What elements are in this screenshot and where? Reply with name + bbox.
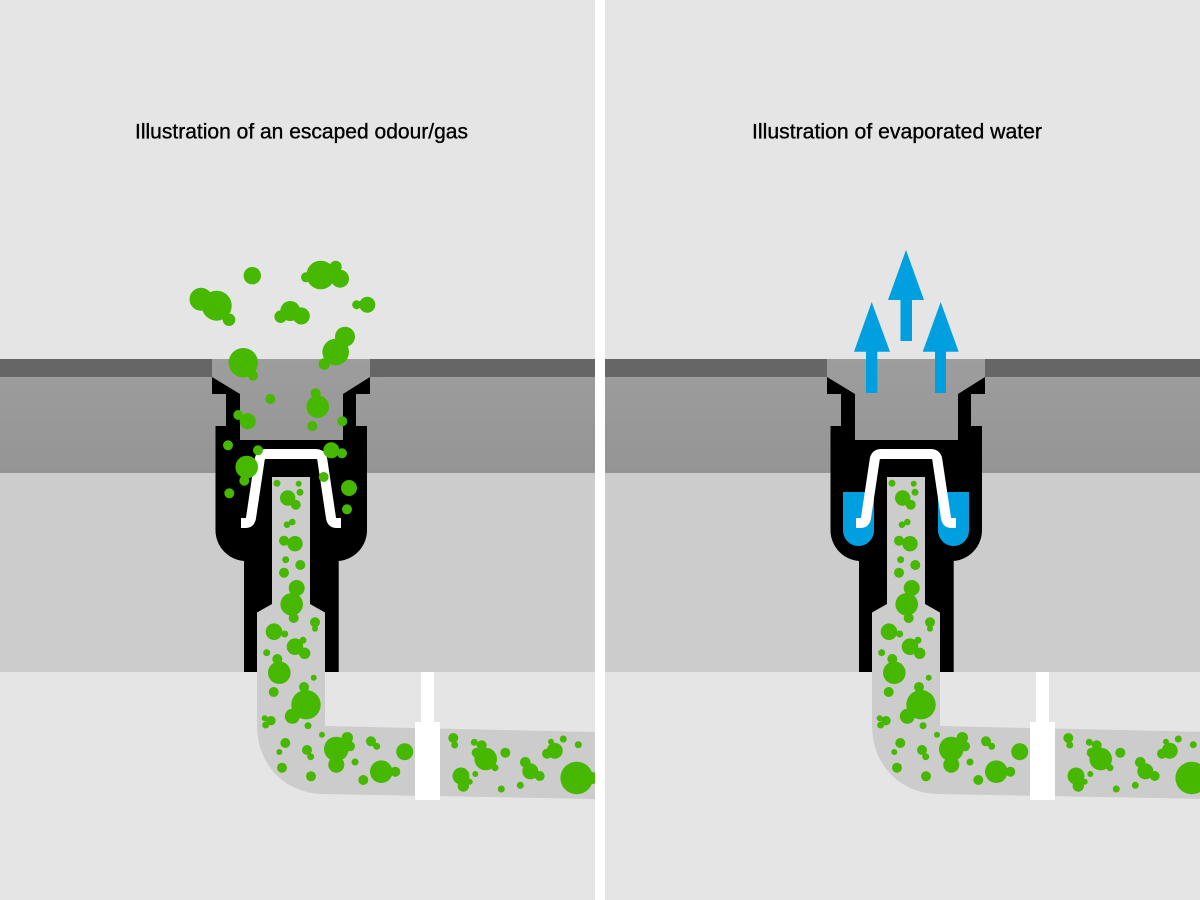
drain trap and pipe — [0, 0, 595, 900]
arrow: centre — [888, 250, 924, 341]
panel: escaped odour — [0, 0, 598, 900]
escaped gas bubbles — [190, 261, 375, 514]
panel: evaporated water — [605, 0, 1200, 900]
white trap bell — [856, 454, 956, 523]
gas bubbles in pipe — [877, 480, 1200, 794]
residual water in trap — [843, 492, 969, 546]
evaporation arrows — [854, 250, 959, 393]
title: escaped odour: Illustration of an escaped odour/gas — [135, 120, 468, 144]
arrow: left — [854, 302, 890, 393]
drain trap and pipe — [605, 0, 1200, 900]
white trap bell — [241, 454, 341, 523]
arrow: right — [923, 302, 959, 393]
gas bubbles in pipe — [262, 480, 598, 794]
title: evaporated water: Illustration of evaporated water — [752, 120, 1042, 144]
